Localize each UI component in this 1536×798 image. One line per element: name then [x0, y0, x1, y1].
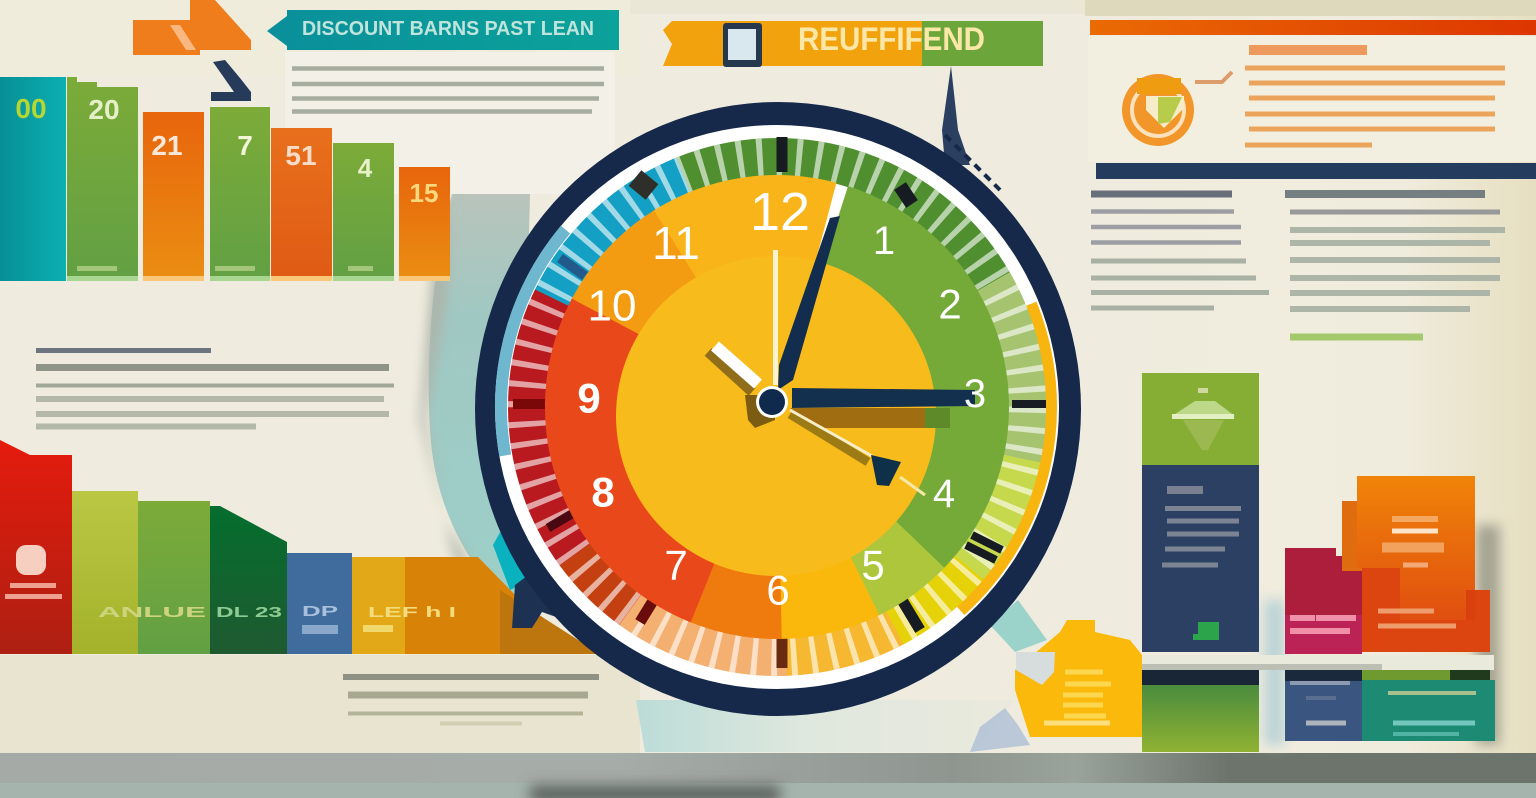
minute hand: [778, 216, 840, 390]
panel: right top card: [1088, 20, 1536, 179]
hub: [745, 386, 788, 428]
numeral 3: 3: [964, 372, 986, 416]
card text: [1392, 516, 1438, 522]
hour marks on ring: [513, 137, 1046, 668]
bar labels: [98, 603, 456, 634]
second hand: [790, 410, 925, 495]
clock face sectors: [613, 243, 941, 571]
text block: bottom: [343, 677, 599, 724]
icon: tablet: [723, 23, 762, 67]
clock outer ring: [475, 102, 1081, 716]
banner: top-left heading: DISCOUNT BARNS PAST LEAN: [302, 18, 594, 40]
bar values: 7: [237, 130, 253, 161]
panel: stacked colour cards: [1285, 476, 1490, 654]
clock numerals: 8: [591, 468, 615, 516]
clock numerals: 12: [750, 182, 810, 242]
panel: green and navy column: [1142, 373, 1259, 652]
thin hand: [773, 250, 778, 385]
heading: [1249, 45, 1367, 55]
tick ring: [425, 55, 1129, 759]
panel: lower green block: [1142, 670, 1259, 752]
callout: orange tag and arrow: [133, 0, 251, 101]
banner: top-left heading: [267, 10, 619, 50]
bar labels: DL 23: [216, 604, 282, 621]
teal shadow behind clock: [420, 194, 1047, 752]
hour hand: [792, 388, 975, 408]
banner: center title: [663, 21, 1043, 67]
white ring: [495, 125, 1059, 689]
bar labels: DP: [302, 603, 338, 620]
bar values: 00: [15, 93, 47, 124]
text lines: [292, 68, 604, 112]
icon: red bar emblem: [5, 545, 62, 599]
card text: [1167, 486, 1203, 494]
bar chart: bottom left: [0, 440, 600, 654]
clock numerals: 9: [577, 374, 601, 422]
bottom shelf: [0, 753, 1536, 798]
bar labels: ANLUE: [98, 604, 206, 621]
text column: right: [1285, 194, 1505, 337]
navy bar: [1096, 163, 1536, 179]
bar labels: LEF h I: [368, 604, 456, 621]
second hand tail: [708, 346, 758, 392]
clock numerals: [577, 182, 962, 614]
clock numerals: 6: [766, 566, 790, 614]
navy tab: [512, 570, 600, 650]
teal pointer: [493, 527, 532, 590]
orange bar: [1090, 20, 1536, 35]
hand shadow: [790, 408, 950, 428]
clock numerals: 2: [938, 280, 962, 328]
panel: yellow tag card: [970, 620, 1142, 752]
bar values: 4: [358, 153, 373, 183]
icon: navy spike: [942, 66, 970, 165]
icon: tree emblem: [1172, 388, 1235, 450]
bar values: 51: [285, 140, 317, 171]
bar values: 15: [410, 178, 438, 208]
clock numerals: 5: [861, 542, 885, 588]
shadow: right cards: [1264, 525, 1500, 745]
bar values: 20: [88, 94, 120, 125]
coloured outer arcs: [420, 50, 1134, 764]
orange text lines: [1245, 68, 1505, 145]
clock numerals: 10: [588, 282, 636, 330]
clock numerals: 4: [933, 472, 955, 516]
dotted line top right of clock: [945, 135, 1000, 190]
bar values: 21: [151, 130, 183, 161]
bar values: [15, 93, 438, 208]
icon: small green square: [1193, 622, 1219, 640]
clock numerals: 7: [664, 542, 688, 588]
text block: left: [36, 350, 394, 426]
text column: left: [1091, 194, 1269, 308]
panel: top-left text card: [285, 52, 615, 194]
title: REUFFIFEND: [798, 21, 985, 57]
clock numerals: 1: [873, 219, 895, 263]
chart: clock: [420, 50, 1134, 764]
bar chart: top left: [0, 77, 450, 281]
panel: small blue and teal cards: [1285, 670, 1495, 741]
panel: shelf strip: [1142, 655, 1494, 670]
icon: shield badge: [1122, 72, 1232, 146]
inner yellow circle: [616, 256, 936, 576]
clock numerals: 11: [652, 217, 700, 269]
